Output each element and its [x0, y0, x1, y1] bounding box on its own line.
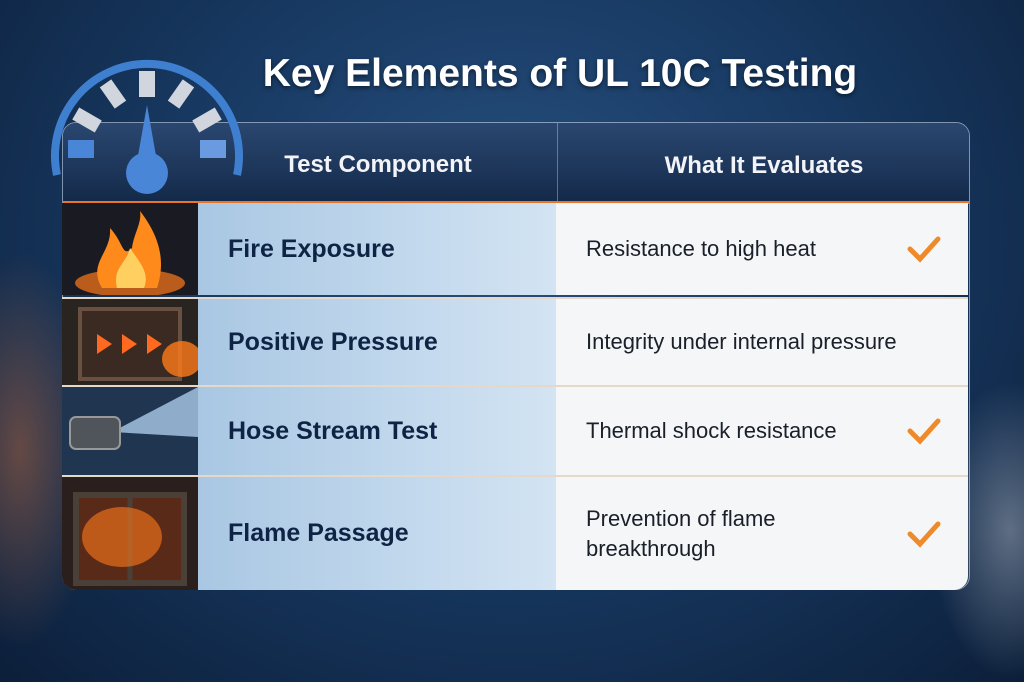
title: Key Elements of UL 10C Testing [263, 52, 857, 95]
row: fire exposure: Resistance to high heat [586, 236, 816, 261]
row: positive pressure: Positive Pressure [228, 328, 438, 356]
row: fire exposure [62, 203, 968, 295]
row: flame passage: Flame Passage [228, 519, 409, 547]
icon: gauge [51, 60, 243, 194]
smoke right [930, 380, 1024, 680]
row: hose stream [62, 385, 968, 475]
header row [63, 123, 969, 204]
row: flame passage: Prevention of flame [586, 506, 776, 530]
smoke left [0, 250, 100, 650]
header: what it evaluates: What It Evaluates [665, 152, 863, 179]
row: fire exposure: Fire Exposure [228, 234, 395, 262]
header: test component: Test Component [284, 151, 472, 178]
check icon [908, 418, 940, 445]
row: positive pressure: Integrity under internal pressure [586, 329, 897, 354]
icon: hose nozzle [62, 387, 198, 475]
row: positive pressure [62, 297, 968, 385]
table [62, 122, 970, 590]
row: hose stream: Hose Stream Test [228, 416, 437, 444]
check icon [908, 522, 940, 548]
row: hose stream: Thermal shock resistance [586, 418, 837, 443]
icon: flame [62, 203, 198, 295]
header: what it evaluates [557, 123, 970, 201]
row: flame passage: breakthrough [586, 536, 716, 560]
row: flame passage [62, 475, 968, 590]
icon: burning window [62, 477, 198, 590]
check icon [908, 236, 940, 263]
icon: pressure door [62, 299, 198, 385]
